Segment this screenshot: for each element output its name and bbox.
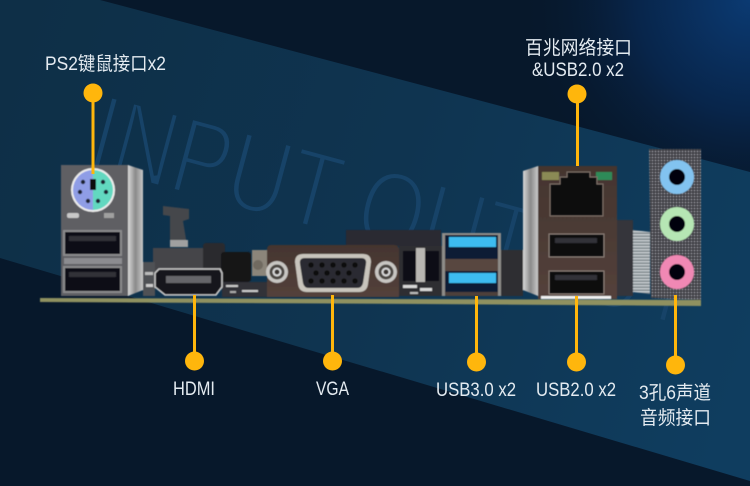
rear IO hardware [40, 149, 701, 306]
components between VGA and USB3 [399, 246, 442, 296]
heatsink [617, 220, 650, 296]
callout: audio [639, 295, 711, 429]
callout: HDMI [173, 295, 215, 400]
connector: audio jacks [649, 149, 701, 300]
callout: USB3.0 [436, 296, 516, 401]
connector: HDMI [155, 269, 222, 295]
callout: VGA [316, 295, 349, 400]
components behind HDMI [143, 206, 268, 297]
callout: LAN and USB2.0: &USB2.0 x2 [532, 60, 624, 81]
connector: LAN and USB2.0 stack [523, 166, 617, 299]
callout: USB2.0: USB2.0 x2 [536, 380, 616, 401]
callout: audio: 3孔6声道 [639, 382, 711, 404]
circuit board edge [40, 298, 701, 306]
callout: USB3.0: USB3.0 x2 [436, 380, 516, 401]
callout: VGA: VGA [316, 379, 349, 400]
callout: PS2: PS2键鼠接口x2 [45, 53, 166, 75]
connector: PS2 and USB stack [61, 165, 143, 296]
connector: VGA [266, 230, 441, 297]
components right of USB3 [501, 250, 523, 296]
callout: audio: 音频接口 [640, 407, 711, 429]
callout: LAN and USB2.0: 百兆网络接口 [525, 37, 632, 59]
watermark: INPUT OUTPUT [94, 98, 702, 320]
callout: LAN and USB2.0 [525, 37, 632, 166]
callout: HDMI: HDMI [173, 379, 215, 400]
connector: USB3.0 stack [442, 233, 501, 296]
callout: USB2.0 [536, 296, 616, 401]
callout: PS2 [45, 53, 166, 174]
